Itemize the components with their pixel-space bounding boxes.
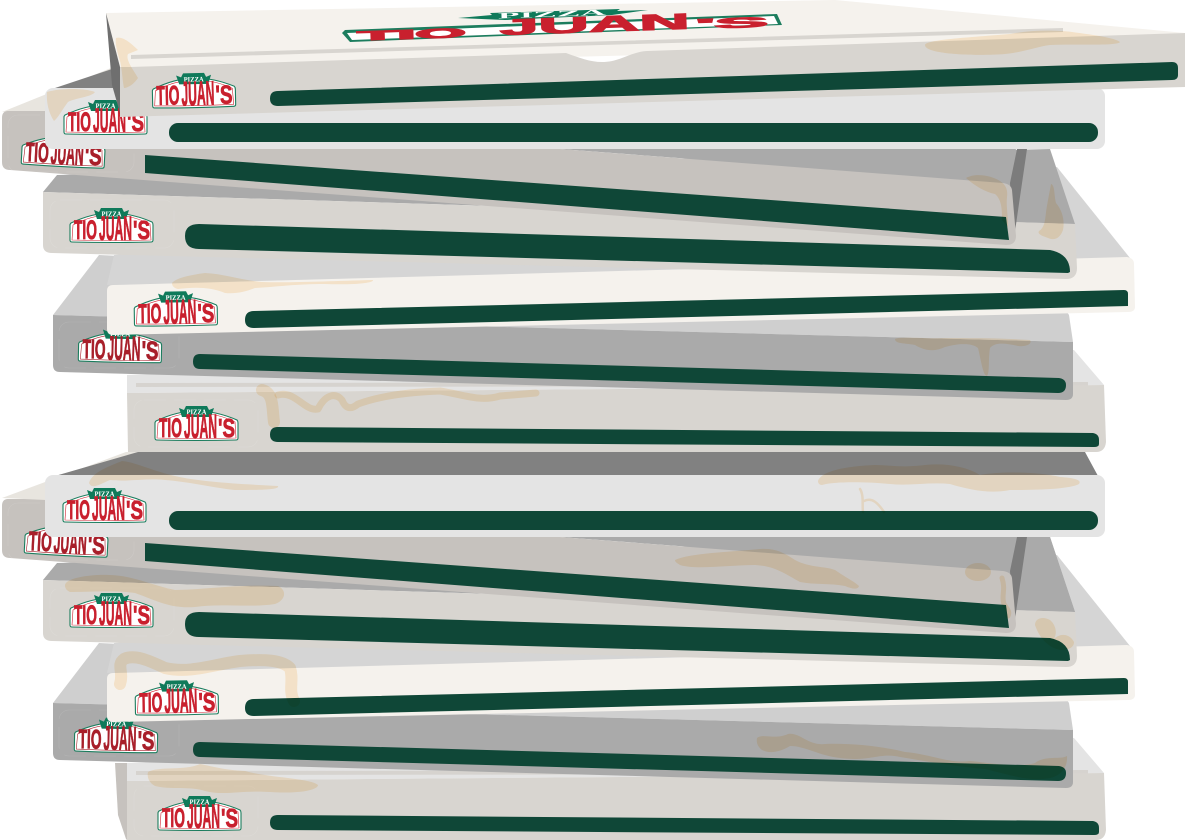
box 1 logo: PIZZA	[184, 75, 204, 84]
box 11 green bar	[245, 678, 1128, 716]
pizza box 11: cream box	[107, 555, 1135, 722]
box 11 logo: TIO	[139, 688, 163, 718]
top box lid logo: PIZZA	[498, 8, 607, 20]
box 2 logo: TIO	[68, 107, 91, 137]
box 11 logo: 'S	[198, 687, 216, 717]
box 12 green bar	[193, 742, 1066, 781]
box 6 green bar	[193, 354, 1066, 393]
box 8 logo: TIO	[67, 495, 90, 525]
box 7 logo: PIZZA	[186, 408, 206, 416]
box 6 logo: JUAN	[107, 330, 141, 368]
box 4 logo: TIO	[74, 215, 97, 245]
box 13 logo	[158, 796, 241, 836]
box 2 green bar	[169, 123, 1098, 142]
box 9 logo: 'S	[87, 529, 105, 560]
box 4 green bar	[185, 224, 1070, 273]
pizza box 5: cream box	[107, 167, 1135, 335]
box 10 logo	[70, 593, 153, 633]
box 2 grease stain	[47, 89, 95, 121]
box 3 grease stain	[966, 175, 1008, 227]
pizza box 3: tilted taupe box	[2, 68, 1027, 245]
box 5 green bar	[245, 290, 1128, 328]
pizza box 9: tilted taupe box	[2, 499, 1075, 633]
box 9 logo	[24, 521, 109, 563]
box 9 logo: JUAN	[53, 523, 88, 562]
box 4 logo	[70, 208, 153, 248]
box 5 logo: 'S	[197, 298, 215, 328]
box 8 logo: 'S	[126, 495, 143, 525]
box 10 logo: 'S	[133, 600, 150, 630]
box 7 logo: 'S	[218, 413, 235, 443]
box 2 logo: JUAN	[93, 102, 126, 140]
box 8 green bar	[169, 511, 1098, 530]
box 10 logo: PIZZA	[102, 596, 122, 604]
box 9 green bar	[145, 543, 1009, 628]
box 12 logo	[74, 717, 158, 759]
box 3 logo	[21, 132, 106, 174]
box 4 logo: PIZZA	[102, 210, 122, 218]
box 9 grease blob	[965, 563, 991, 581]
box 1 grease stain right	[925, 31, 1120, 55]
box 9 grease drip	[1002, 578, 1009, 616]
box 8 logo: PIZZA	[94, 490, 114, 498]
box 11 logo: JUAN	[164, 682, 198, 721]
box 13 logo: JUAN	[187, 798, 220, 836]
box 7 grease stain trail	[278, 391, 536, 409]
box 8 grease stain right	[818, 464, 1080, 492]
box 10 logo: TIO	[74, 600, 97, 630]
box 9 grease stain long	[675, 549, 859, 589]
box 7 grease stain blob	[262, 390, 274, 422]
box 3 logo: TIO	[25, 137, 50, 168]
box 1 logo: 'S	[215, 79, 233, 110]
box 13 logo: PIZZA	[190, 798, 210, 806]
box 10 grease stain left	[65, 575, 284, 607]
box 12 logo: JUAN	[103, 720, 137, 758]
box 6 logo: 'S	[141, 335, 159, 366]
box 10 grease stain right	[1035, 618, 1074, 650]
box 6 logo: TIO	[82, 334, 106, 365]
box 13 logo: 'S	[221, 803, 238, 833]
box 1 logo	[152, 72, 236, 114]
box 4 logo: JUAN	[99, 210, 132, 248]
box 3 green bar	[145, 155, 1009, 240]
top box lid logo	[342, 8, 782, 43]
box 12 logo: TIO	[78, 724, 102, 755]
box 12 logo: 'S	[137, 725, 155, 756]
pizza box 8: light grey box	[2, 452, 1105, 537]
box 12 logo: PIZZA	[106, 720, 126, 729]
box 5 logo: JUAN	[163, 293, 197, 332]
pizza box 12: grey box	[53, 643, 1073, 788]
box 5 grease stain	[172, 273, 373, 293]
box 10 logo: JUAN	[99, 595, 132, 633]
pizza box 7: taupe box with logo	[127, 350, 1106, 452]
box 6 logo	[78, 327, 162, 369]
pizza box 4: taupe box	[43, 149, 1077, 279]
box 2 logo	[64, 100, 147, 140]
box 5 logo: TIO	[138, 299, 162, 329]
box 5 logo	[134, 291, 218, 332]
box 13 green bar	[270, 815, 1099, 835]
box 1 green bar	[270, 62, 1178, 106]
box 7 logo	[155, 406, 238, 446]
box 8 logo	[63, 488, 146, 528]
box 11 logo	[135, 680, 219, 721]
box 8 grease drip	[860, 489, 884, 512]
pizza box 13: bottom box	[115, 738, 1106, 840]
box 3 logo: 'S	[84, 140, 102, 171]
box 5 logo: PIZZA	[166, 294, 186, 302]
box 4 grease stain	[1039, 184, 1064, 239]
top box lid logo: JUAN	[499, 9, 690, 40]
box 11 grease stain	[120, 657, 294, 701]
box 8 grease stain left	[89, 461, 278, 490]
box 9 logo: TIO	[28, 526, 53, 557]
box 7 logo: JUAN	[184, 408, 217, 446]
box 4 logo: 'S	[133, 215, 150, 245]
pizza box 6: grey box	[53, 255, 1073, 400]
box 12 grease stain	[757, 734, 1067, 779]
box 13 logo: TIO	[162, 803, 185, 833]
box 2 logo: 'S	[127, 107, 144, 137]
top box lid logo: TIO	[358, 25, 466, 43]
box 13 grease stain	[148, 764, 318, 793]
pizza box 2: light grey box	[45, 68, 1105, 149]
box 3 logo: JUAN	[50, 134, 85, 173]
box 2 logo: PIZZA	[96, 102, 116, 110]
box 7 green bar	[270, 427, 1099, 447]
pizza box 1: top box	[106, 0, 1185, 117]
box 6 grease stain	[895, 338, 1031, 376]
box 1 logo: TIO	[156, 80, 180, 111]
box 7 logo: TIO	[159, 413, 182, 443]
pizza box 10: taupe box	[43, 537, 1077, 667]
box 11 logo: PIZZA	[167, 683, 187, 691]
top box lid logo: 'S	[696, 14, 768, 32]
box 6 logo: PIZZA	[110, 330, 130, 339]
box 1 grease stain left	[116, 38, 138, 88]
box 10 green bar	[185, 612, 1070, 661]
box 1 logo: JUAN	[181, 75, 215, 113]
box 8 logo: JUAN	[92, 490, 125, 528]
